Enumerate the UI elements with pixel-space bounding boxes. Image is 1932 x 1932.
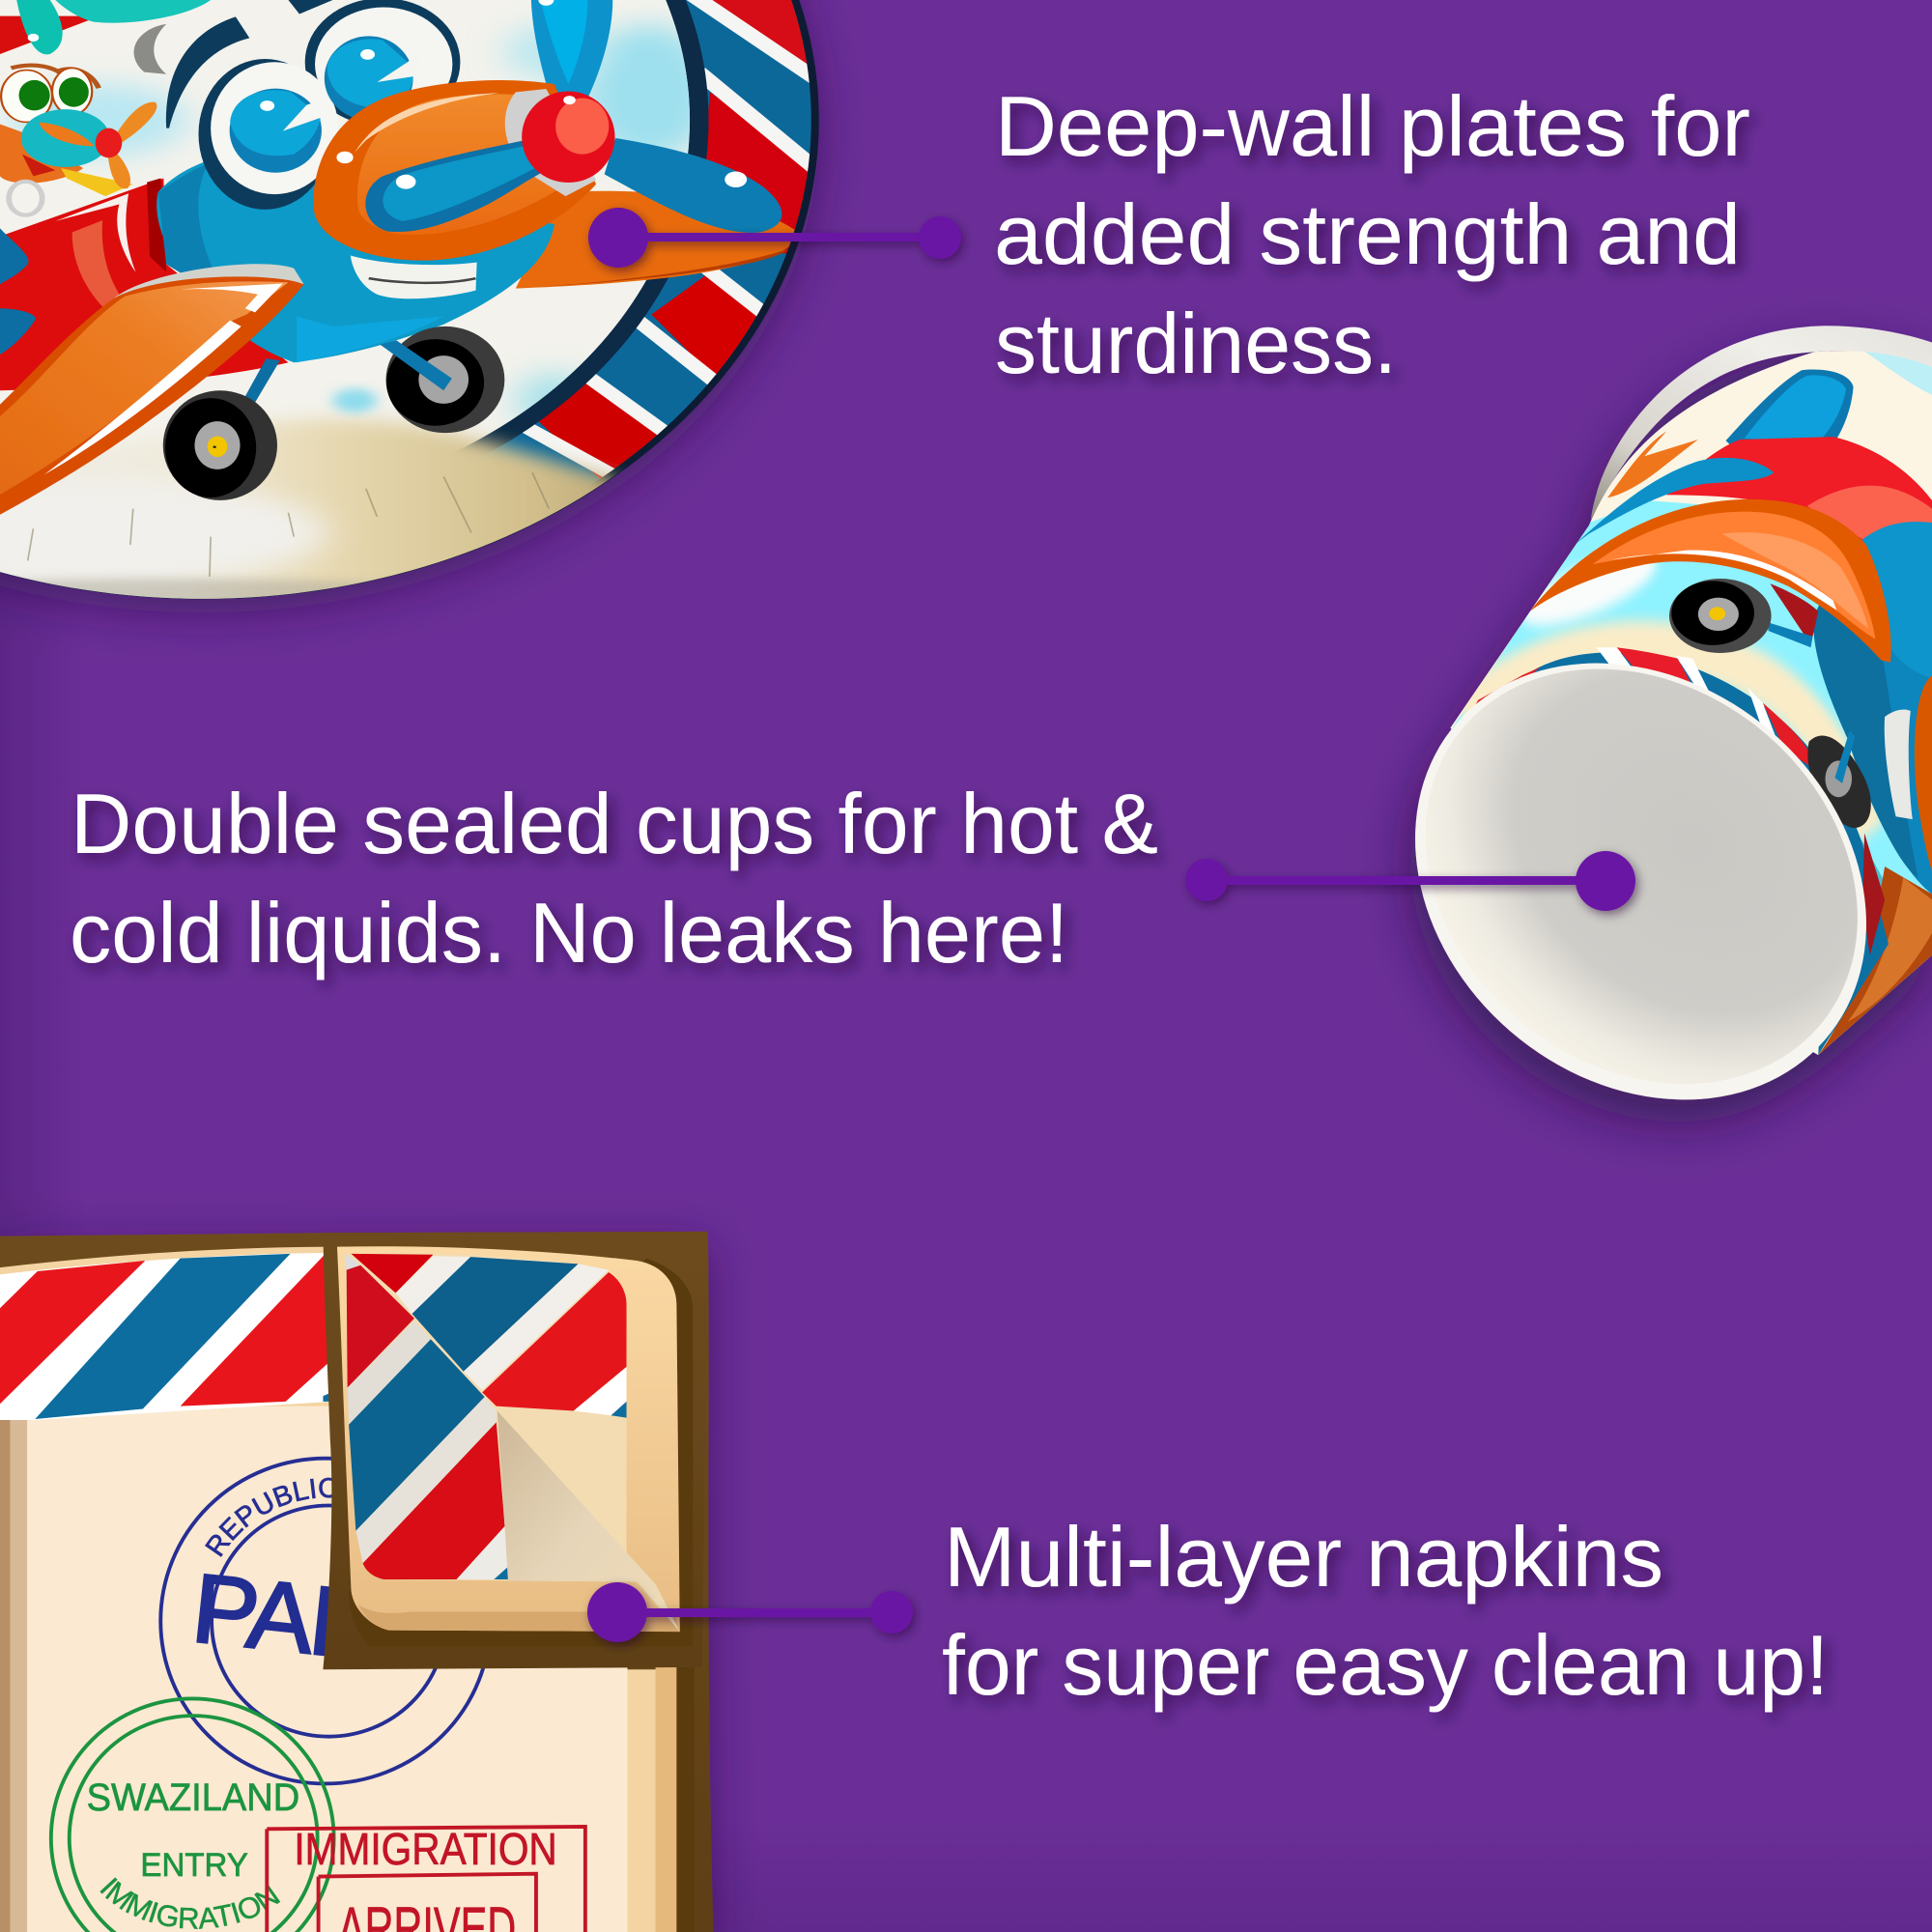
front wheel xyxy=(163,390,277,500)
stamp: Paris xyxy=(158,1457,485,1785)
napkin top stripes xyxy=(0,1253,332,1420)
blue body xyxy=(156,158,554,362)
stamp: Swaziland xyxy=(48,1696,336,1932)
flame xyxy=(1607,431,1698,497)
napkin brown backing xyxy=(0,1232,714,1932)
propeller blades xyxy=(365,138,546,232)
rear wing xyxy=(516,191,796,289)
text: napkins: Multi-layer napkins xyxy=(944,1509,1663,1605)
landing gear struts xyxy=(244,358,280,403)
text: napkins: for super easy clean up! xyxy=(942,1617,1829,1713)
eyes xyxy=(166,0,460,210)
stamp: Swaziland: SWAZILAND xyxy=(87,1775,299,1819)
nose cowling xyxy=(313,80,596,261)
plate inner ring xyxy=(0,0,696,515)
napkin folded flap xyxy=(323,1232,707,1669)
red under wing xyxy=(1770,583,1818,644)
cup base inner xyxy=(1400,613,1883,1140)
small blue wing xyxy=(1575,458,1774,545)
wheel two xyxy=(1807,730,1871,828)
orange wing xyxy=(1530,499,1891,663)
red fuselage xyxy=(1666,437,1932,551)
right orange cowling xyxy=(1915,675,1932,872)
plate rim xyxy=(0,0,819,599)
text: plates: sturdiness. xyxy=(995,296,1397,391)
tail fin xyxy=(1726,370,1854,452)
cup body print xyxy=(1427,323,1932,1099)
cup rim xyxy=(1591,326,1932,520)
cup base outer xyxy=(1388,605,1893,1158)
text: cups: cold liquids. No leaks here! xyxy=(70,885,1068,980)
base stripes xyxy=(1530,652,1889,1055)
teeth xyxy=(351,256,477,298)
stamp: Swaziland: ENTRY xyxy=(140,1847,248,1884)
text: plates xyxy=(994,78,1750,391)
stamp: Paris: PAR xyxy=(187,1553,384,1681)
plate striped border xyxy=(488,0,811,485)
red fuselage xyxy=(0,178,288,390)
upper blade xyxy=(531,0,612,99)
wheel one xyxy=(1669,579,1812,653)
left blue fragments xyxy=(0,228,29,284)
text: cups xyxy=(70,776,1158,980)
rear wheel xyxy=(380,327,504,433)
teeth xyxy=(1885,710,1913,819)
blue fuselage xyxy=(1813,523,1932,895)
panel: plate photo xyxy=(0,0,887,649)
panel: cup photo xyxy=(1388,323,1932,1158)
plate well xyxy=(0,0,690,464)
flap stripes xyxy=(346,1254,627,1579)
stamp: Paris: REPUBLIC xyxy=(205,1478,332,1557)
text: napkins xyxy=(942,1509,1829,1713)
text: cups: Double sealed cups for hot & xyxy=(71,776,1158,871)
panel: napkin photo xyxy=(0,1221,735,1932)
small teal plane xyxy=(0,0,211,74)
connector: plate callout xyxy=(588,208,961,268)
text: plates: added strength and xyxy=(994,186,1741,282)
small orange plane xyxy=(0,66,156,215)
text: plates: Deep-wall plates for xyxy=(995,78,1750,174)
plate outer wall xyxy=(0,383,624,612)
lower orange wing xyxy=(1818,867,1932,1055)
front wing xyxy=(0,266,304,515)
napkin face xyxy=(0,1247,695,1932)
stamp: Immigration arrived xyxy=(267,1824,585,1932)
airplane illustration xyxy=(0,0,796,515)
connector: napkin callout xyxy=(587,1582,913,1642)
red hub xyxy=(522,92,615,183)
stamp: Immigration arrived: IMMIGRATION xyxy=(294,1824,557,1874)
flap fold corner xyxy=(497,1410,680,1632)
connector: cup callout xyxy=(1185,851,1635,911)
